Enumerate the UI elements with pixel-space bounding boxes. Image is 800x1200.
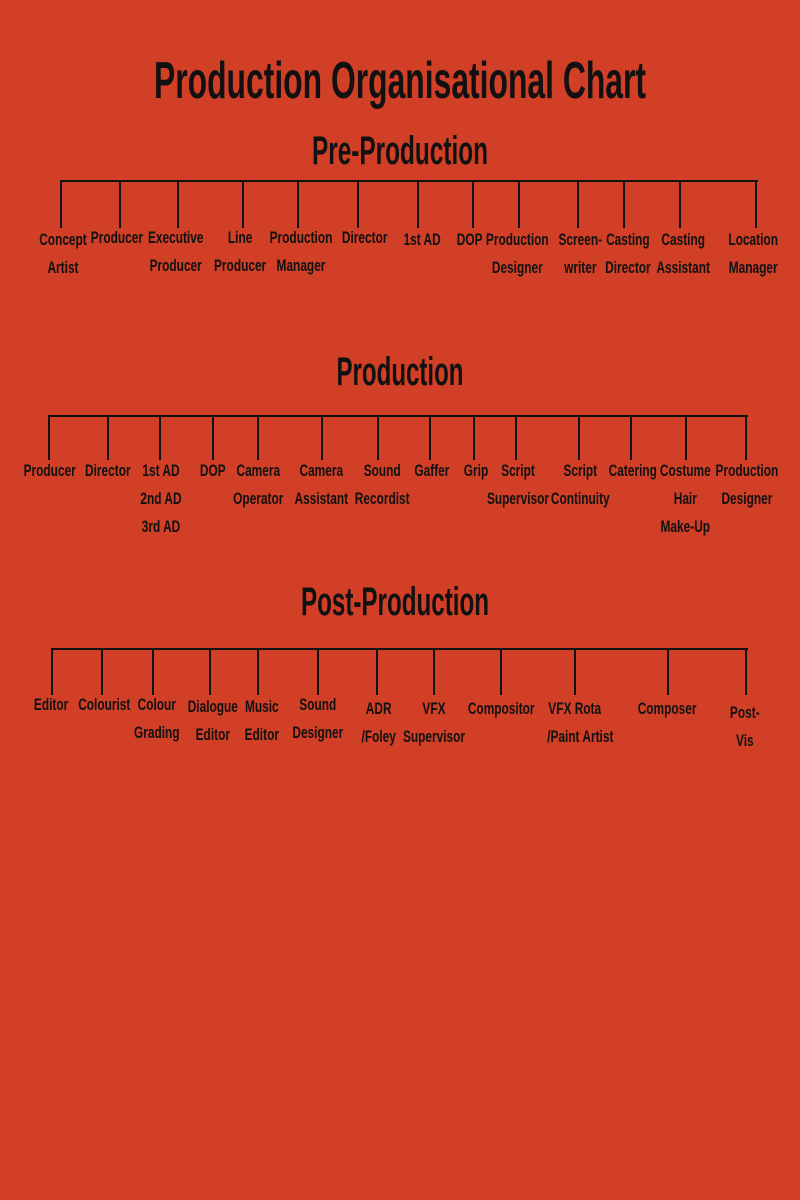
labels: pre-production: DOP (457, 231, 483, 250)
labels: pre-production: Designer (492, 259, 543, 278)
labels: production: Make-Up (661, 518, 710, 537)
labels: post-production: /Paint Artist (547, 728, 614, 747)
chart: post-production (51, 649, 748, 695)
labels: post-production: Supervisor (403, 728, 465, 747)
labels: production: Gaffer (414, 462, 450, 481)
labels: post-production: Colour (138, 696, 176, 715)
labels: production: 3rd AD (142, 518, 180, 537)
labels: post-production: Grading (134, 724, 180, 743)
labels: production: Sound (364, 462, 401, 481)
labels: pre-production: Manager (729, 259, 778, 278)
labels: pre-production: Producer (150, 257, 202, 276)
labels: production: Recordist (355, 490, 410, 509)
labels: production: Camera (299, 462, 344, 481)
labels: post-production: Sound (299, 696, 336, 715)
labels: production: DOP (200, 462, 226, 481)
labels: production: Supervisor (487, 490, 549, 509)
labels: production: Script (563, 462, 597, 481)
chart: production (48, 416, 748, 460)
labels: pre-production: Line (228, 229, 252, 248)
labels: pre-production: Casting (661, 231, 705, 250)
labels: post-production: Composer (638, 700, 697, 719)
labels: pre-production: Director (342, 229, 388, 248)
labels: post-production: Post- (730, 704, 760, 723)
labels: production: Continuity (551, 490, 610, 509)
labels: post-production: Music (245, 698, 279, 717)
labels: post-production: ADR (366, 700, 392, 719)
labels: pre-production: Concept (39, 231, 87, 250)
labels: pre-production: writer (563, 259, 597, 278)
labels: pre-production: Artist (47, 259, 79, 278)
labels: pre-production: Assistant (656, 259, 710, 278)
labels: post-production: VFX (422, 700, 446, 719)
chart: pre-production (60, 181, 758, 228)
labels: post-production: VFX Rota (548, 700, 602, 719)
labels: production: Producer (24, 462, 76, 481)
labels: post-production: Colourist (78, 696, 130, 715)
labels: pre-production: Manager (277, 257, 326, 276)
labels: post-production: /Foley (362, 728, 397, 747)
labels: production: Costume (660, 462, 711, 481)
labels: production: Director (85, 462, 131, 481)
labels: production: Production (716, 462, 778, 481)
labels: pre-production: Production (486, 231, 549, 250)
labels: production: Script (501, 462, 535, 481)
labels: pre-production: Executive (148, 229, 203, 248)
labels: pre-production: Casting (606, 231, 650, 250)
labels: pre-production: Production (270, 229, 332, 248)
labels: post-production: Vis (736, 732, 754, 751)
labels: post-production (34, 696, 760, 751)
labels: pre-production: Producer (214, 257, 266, 276)
labels: production: Grip (464, 462, 488, 481)
labels: post-production: Dialogue (188, 698, 238, 717)
labels: production: Designer (721, 490, 773, 509)
labels: pre-production: Producer (91, 229, 143, 248)
labels: pre-production: Director (605, 259, 651, 278)
labels: post-production: Designer (292, 724, 343, 743)
labels: production: Camera (236, 462, 281, 481)
labels: post-production: Editor (196, 726, 230, 745)
labels: post-production: Editor (34, 696, 69, 715)
labels: pre-production: Location (728, 231, 778, 250)
labels: pre-production (39, 229, 778, 278)
labels: production: 1st AD (142, 462, 180, 481)
labels: post-production: Editor (245, 726, 279, 745)
labels: post-production: Compositor (468, 700, 535, 719)
labels: pre-production: Screen- (558, 231, 602, 250)
heading: post-production: Post-Production (301, 580, 489, 624)
labels: production: Catering (609, 462, 657, 481)
labels: production: 2nd AD (140, 490, 182, 509)
labels: production: Hair (674, 490, 697, 509)
labels: pre-production: 1st AD (403, 231, 441, 250)
labels: production: Operator (233, 490, 284, 509)
labels: production (24, 462, 778, 537)
heading: production: Production (336, 350, 464, 394)
labels: production: Assistant (295, 490, 348, 509)
heading: pre-production: Pre-Production (312, 129, 488, 173)
